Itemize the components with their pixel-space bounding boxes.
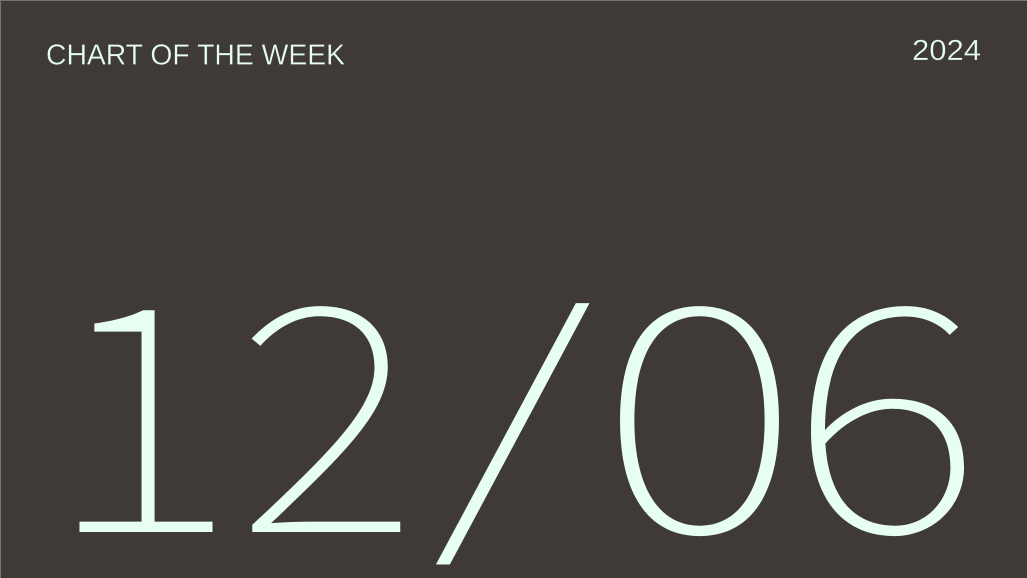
- large date: 12/06: [44, 167, 982, 578]
- year label: 2024: [912, 35, 981, 67]
- heading: chart of the week: CHART OF THE WEEK: [46, 40, 346, 72]
